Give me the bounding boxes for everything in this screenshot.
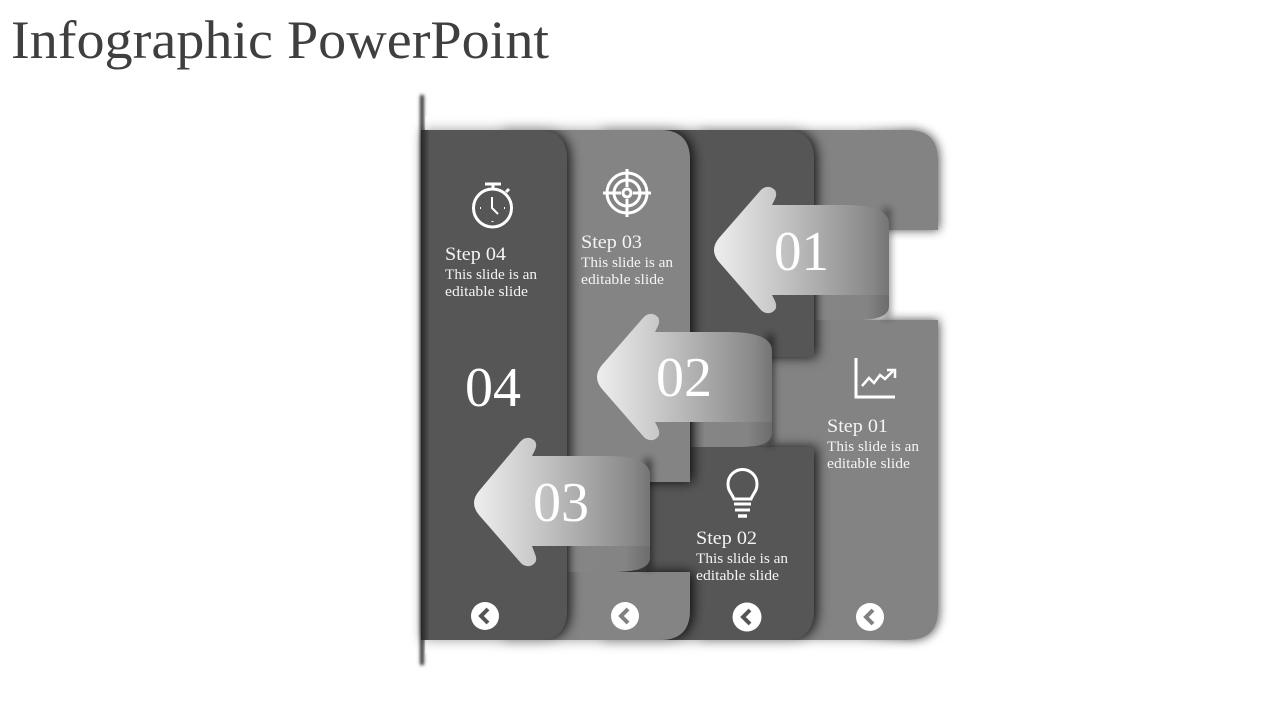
text: step 03	[581, 232, 674, 288]
title: Infographic PowerPoint	[11, 10, 549, 70]
text: step 02: Step 02	[696, 528, 757, 549]
text: step 02	[696, 528, 789, 584]
left edge shading	[421, 130, 430, 640]
arrow 03	[474, 438, 651, 572]
text: step 02: editable slide	[696, 568, 779, 584]
text: step 02: This slide is an	[696, 551, 789, 567]
icon: chevron button 02	[732, 602, 762, 632]
icon: stopwatch	[474, 184, 512, 227]
soften bottom shadow	[425, 640, 915, 654]
vertical axis bar	[420, 95, 424, 665]
text: step 04: Step 04	[445, 244, 507, 265]
text: step 01: editable slide	[827, 456, 910, 472]
text: step 03: This slide is an	[581, 255, 674, 271]
soften top shadow	[425, 116, 915, 130]
panel: step 03 background	[500, 130, 690, 640]
icon: light bulb	[728, 470, 757, 516]
icon: chevron button 04	[471, 602, 499, 630]
icon: chevron button 01	[856, 603, 884, 631]
text: step 03: Step 03	[581, 232, 642, 253]
number 04: 04	[465, 357, 521, 419]
panel: step 02 background	[600, 130, 814, 640]
text: step 04: editable slide	[445, 284, 528, 300]
text: step 01	[827, 416, 920, 472]
text: step 01: This slide is an	[827, 439, 920, 455]
icon: chevron button 03	[611, 602, 639, 630]
text: step 01: Step 01	[827, 416, 888, 437]
arrow 02	[597, 314, 773, 447]
text: step 04	[445, 244, 538, 300]
text: step 03: editable slide	[581, 272, 664, 288]
panel: step 01 background	[700, 130, 938, 640]
arrow 03: 03	[533, 472, 589, 534]
icon: target	[603, 169, 651, 217]
arrow 02: 02	[656, 347, 712, 409]
text: step 04: This slide is an	[445, 267, 538, 283]
arrow 01: 01	[774, 221, 829, 283]
arrow 01	[714, 187, 890, 320]
icon: line chart	[856, 358, 895, 397]
panel: step 04 background	[421, 130, 567, 640]
